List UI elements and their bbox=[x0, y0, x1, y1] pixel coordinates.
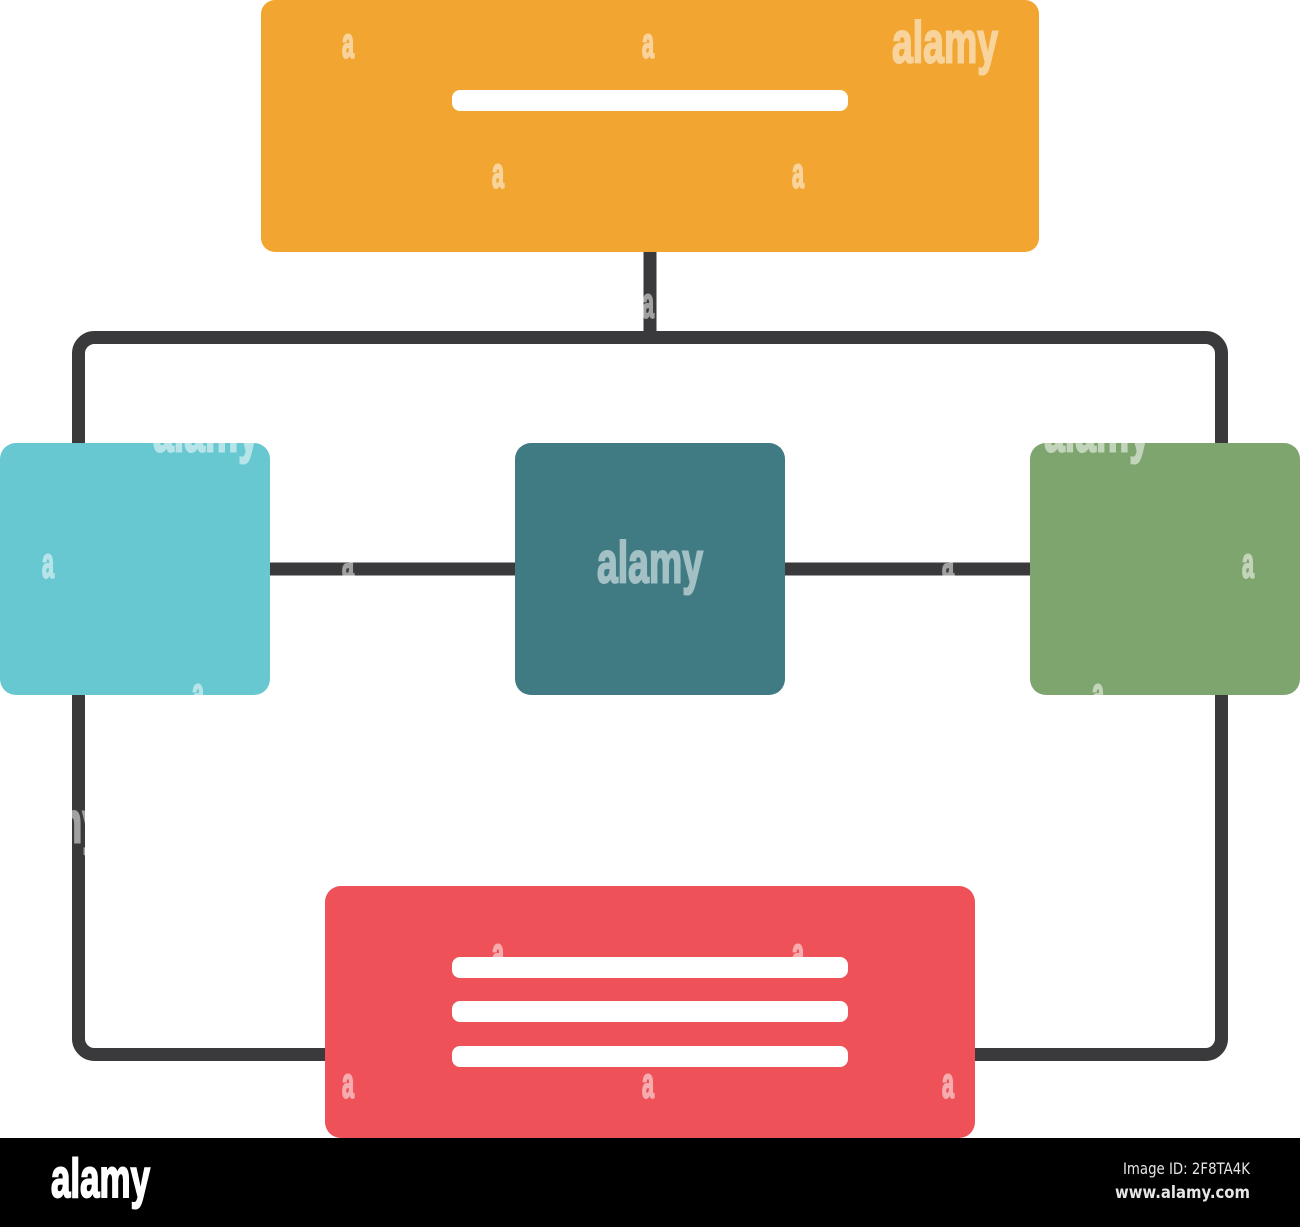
footer band bbox=[0, 1138, 1300, 1227]
watermark text layer: a bbox=[792, 930, 805, 978]
watermark text layer: a bbox=[192, 670, 205, 718]
panel: bottom red box bbox=[325, 886, 975, 1138]
watermark text layer: alamy bbox=[153, 400, 259, 464]
watermark text layer: a bbox=[642, 1060, 655, 1108]
text placeholder bar: top box bbox=[452, 90, 848, 111]
connector: horizontal line through middle row bbox=[268, 562, 1032, 576]
website: www.alamy.com bbox=[1115, 1183, 1250, 1203]
watermark text layer: a bbox=[942, 540, 955, 588]
connector: top box to frame bbox=[644, 250, 656, 334]
watermark text layer: a bbox=[942, 1060, 955, 1108]
panel: top orange box bbox=[261, 0, 1039, 252]
image id: Image ID: 2F8TA4K bbox=[1123, 1159, 1250, 1178]
watermark text layer: a bbox=[1092, 670, 1105, 718]
connector: frame loop linking the boxes bbox=[78, 338, 1222, 1054]
watermark text layer: alamy bbox=[1044, 400, 1150, 464]
text placeholder bars: bottom box bbox=[452, 957, 848, 1067]
panel: left cyan box bbox=[0, 443, 270, 695]
watermark text layer: alamy bbox=[597, 530, 703, 596]
watermark text layer: alamy bbox=[0, 790, 103, 856]
watermark text layer: a bbox=[642, 280, 655, 328]
watermark text layer: alamy bbox=[892, 10, 998, 76]
watermark text layer: a bbox=[642, 20, 655, 68]
watermark text layer: a bbox=[342, 540, 355, 588]
watermark text layer: a bbox=[342, 1060, 355, 1108]
footer logo: alamy bbox=[51, 1147, 150, 1209]
panel: centre teal box bbox=[515, 443, 785, 695]
panel: right green box bbox=[1030, 443, 1300, 695]
watermark text layer: a bbox=[42, 540, 55, 588]
watermark text layer: a bbox=[492, 150, 505, 198]
watermark text layer: a bbox=[342, 20, 355, 68]
watermark text layer: a bbox=[792, 150, 805, 198]
watermark text layer: a bbox=[492, 930, 505, 978]
watermark text layer: a bbox=[1242, 540, 1255, 588]
